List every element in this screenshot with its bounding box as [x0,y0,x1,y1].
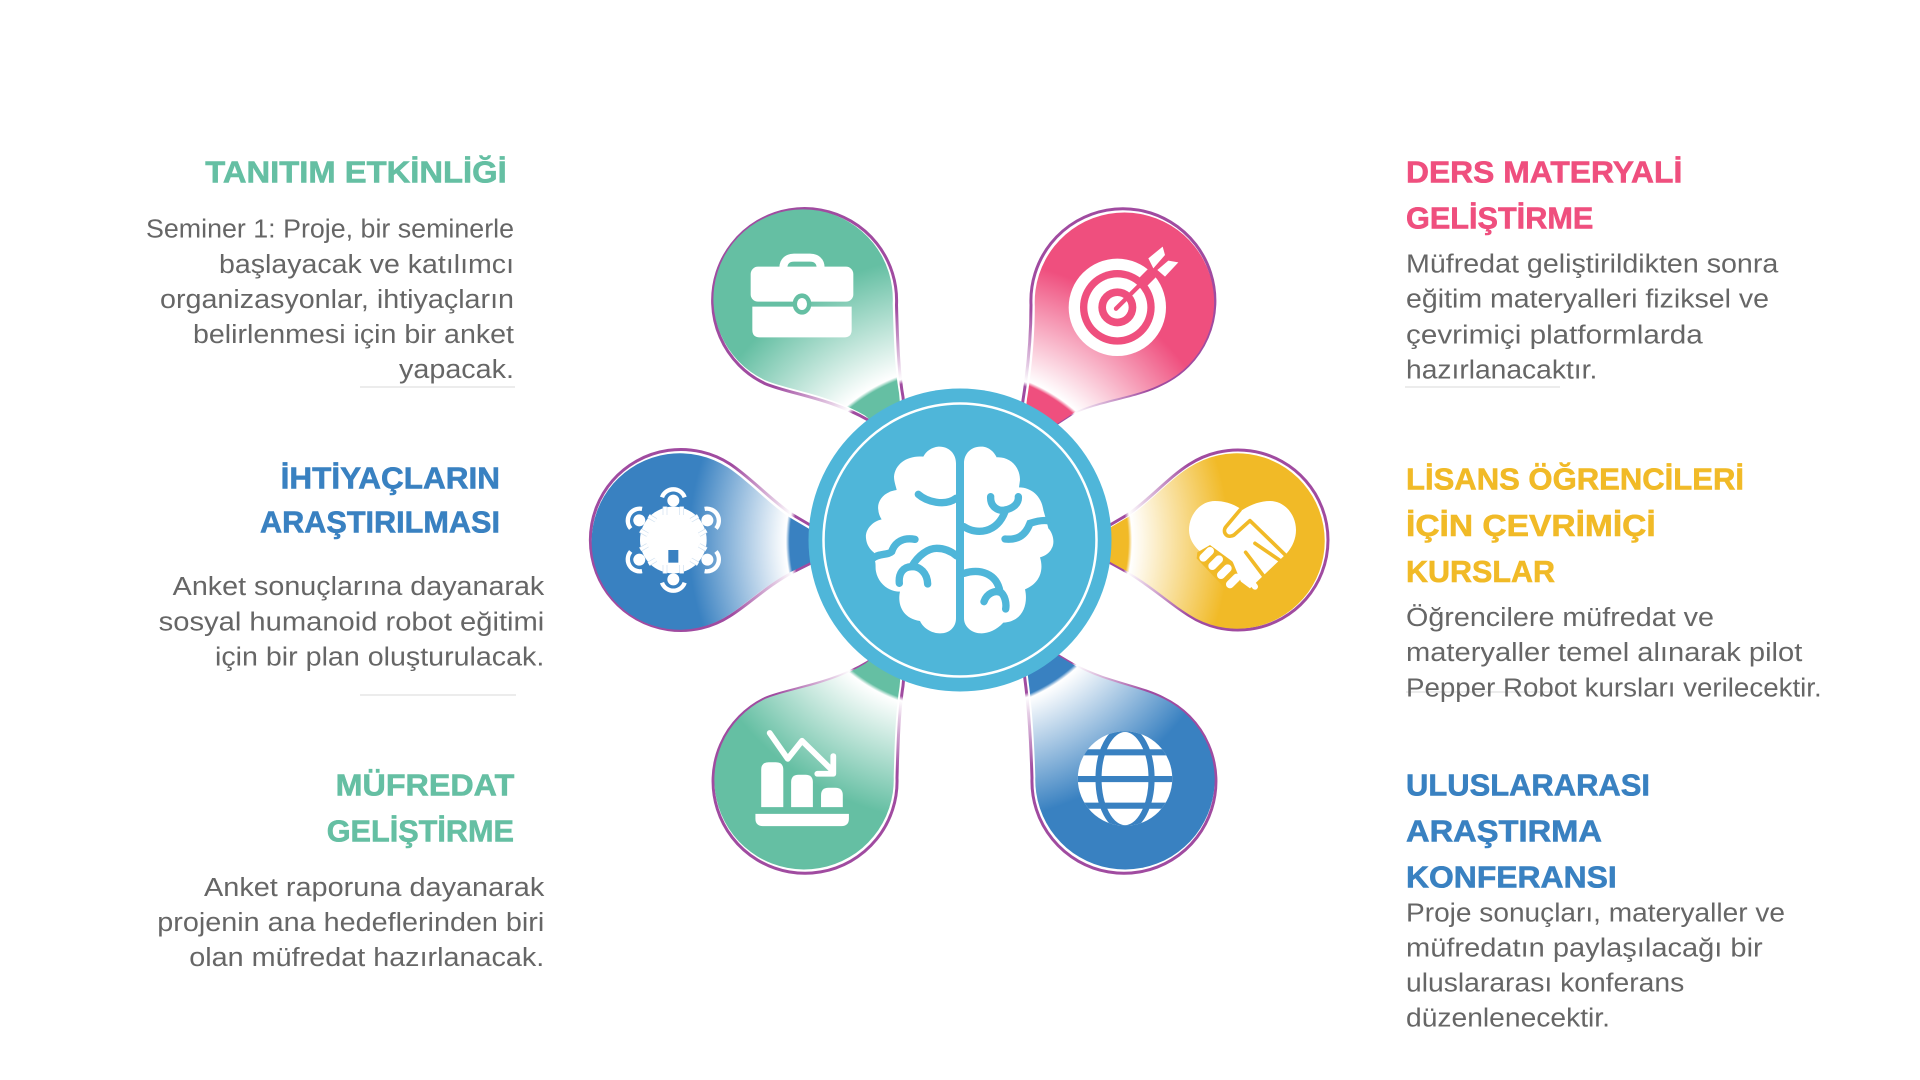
body [1406,251,1779,384]
body: eğitim materyalleri fiziksel ve [1406,286,1769,314]
petal: blue bottom-right with globe [1022,652,1216,873]
body [159,573,545,671]
body: materyaller temel alınarak pilot [1406,639,1802,667]
heading [1406,768,1650,894]
heading: GELİŞTİRME [1406,200,1593,235]
body [1406,604,1822,702]
text block: DERS MATERYALİ GELİŞTİRME [1406,154,1779,384]
heading: ULUSLARARASI [1406,768,1650,803]
body: sosyal humanoid robot eğitimi [159,608,544,636]
petal: yellow right with handshake heart [1098,450,1328,630]
body: için bir plan oluşturulacak. [215,643,544,671]
heading: GELİŞTİRME [327,814,514,849]
petal: green bottom-left with falling bar chart [713,652,906,873]
icon: meeting table [624,489,723,591]
icon: handshake heart [1189,501,1296,590]
body: olan müfredat hazırlanacak. [189,944,544,972]
heading: KURSLAR [1406,554,1555,589]
body: yapacak. [399,356,514,384]
icon: target [1069,247,1178,356]
heading [1406,154,1682,235]
body: Öğrencilere müfredat ve [1406,604,1714,632]
body [1406,900,1785,1033]
heading: İÇİN ÇEVRİMİÇİ [1406,508,1656,543]
heading: LİSANS ÖĞRENCİLERİ [1406,462,1744,496]
body [157,874,545,972]
text block: LİSANS ÖĞRENCİLERİ İÇİN ÇEVRİMİÇİ KURSLAR [1406,462,1822,702]
heading [260,460,500,539]
icon: falling bar chart [755,733,849,826]
heading: İHTİYAÇLARIN [281,460,500,495]
body: belirlenmesi için bir anket [193,321,514,349]
petal: pink top-right with target [1020,209,1215,428]
body: Anket raporuna dayanarak [204,874,545,902]
petal: green top-left with briefcase [713,209,906,430]
text block: İHTİYAÇLARIN ARAŞTIRILMASI [159,460,545,671]
body: müfredatın paylaşılacağı bir [1406,935,1763,963]
heading: KONFERANSI [1406,859,1617,894]
heading: ARAŞTIRMA [1406,814,1602,849]
body: düzenlenecektir. [1406,1005,1610,1033]
heading: DERS MATERYALİ [1406,154,1682,189]
body [146,216,514,384]
body: Seminer 1: Proje, bir seminerle [146,216,514,244]
body: uluslararası konferans [1406,970,1684,998]
text block: TANITIM ETKİNLİĞİ [146,154,514,384]
text block: MÜFREDAT GELİŞTİRME [157,768,545,972]
body: Anket sonuçlarına dayanarak [173,573,545,601]
central circle with brain [808,388,1112,692]
body: Müfredat geliştirildikten sonra [1406,251,1779,279]
body: Proje sonuçları, materyaller ve [1406,900,1785,928]
heading: MÜFREDAT [336,768,514,803]
heading: ARAŞTIRILMASI [260,504,500,539]
body: hazırlanacaktır. [1406,356,1597,384]
heading: TANITIM ETKİNLİĞİ [205,154,507,189]
body: projenin ana hedeflerinden biri [157,909,544,937]
body: çevrimiçi platformlarda [1406,321,1704,349]
heading [327,768,514,849]
icon: brain [866,447,1053,633]
petal: blue left with meeting table [590,450,825,630]
heading [1406,462,1744,589]
body: Pepper Robot kursları verilecektir. [1406,674,1822,702]
body: organizasyonlar, ihtiyaçların [160,286,514,314]
body: başlayacak ve katılımcı [219,251,514,279]
icon: globe [1078,731,1172,826]
icon: briefcase [751,258,853,337]
text block: ULUSLARARASI ARAŞTIRMA KONFERANSI [1406,768,1785,1033]
